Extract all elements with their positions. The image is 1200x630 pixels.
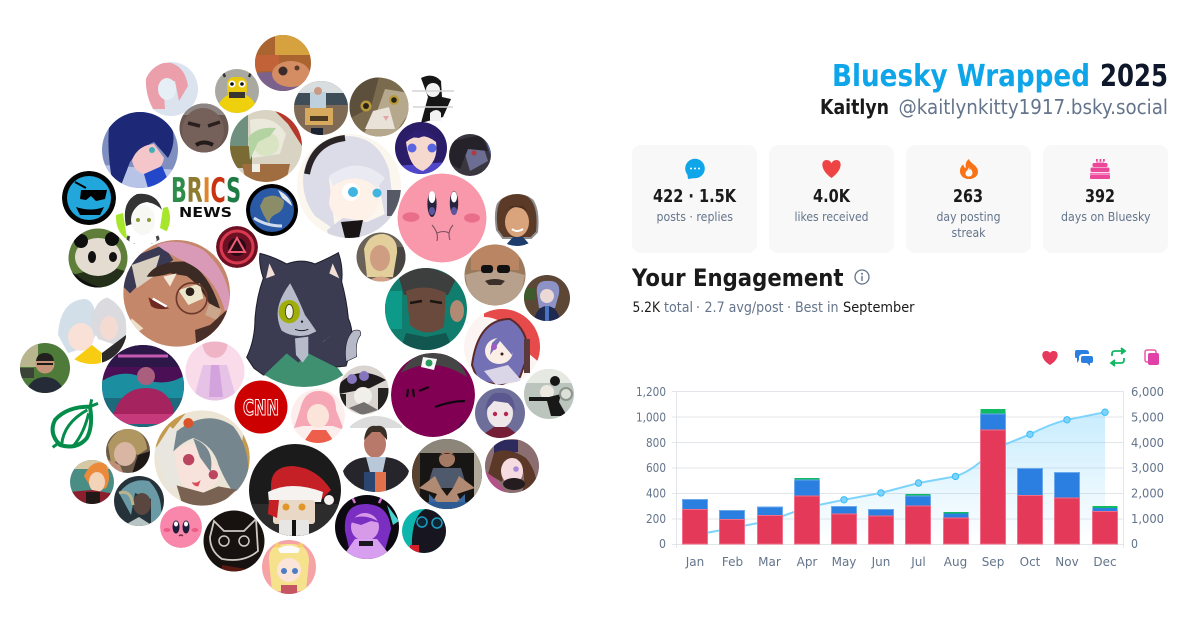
- stacked bars: [682, 409, 1118, 544]
- avatar: pink hair anime girl: [144, 62, 198, 116]
- engagement summary: total: [664, 300, 693, 316]
- avatar: green hair anime at table: [230, 110, 302, 182]
- icon: chat bubble: [685, 159, 705, 179]
- right axis labels: 1,000: [1131, 512, 1164, 526]
- avatar: Kirby face large: [398, 174, 486, 262]
- icon: flame: [960, 159, 978, 179]
- right axis labels: 3,000: [1131, 461, 1164, 475]
- avatar: orange hair anime: [69, 459, 115, 505]
- avatar: plum character with hat: [391, 353, 475, 437]
- avatar: man in suit: [343, 416, 409, 492]
- avatar: The Onion logo: [53, 399, 98, 447]
- right axis labels: 6,000: [1131, 385, 1164, 399]
- icon: likes heart: [1042, 351, 1058, 365]
- cumulative line: [695, 409, 1108, 544]
- left axis labels: [636, 385, 666, 551]
- avatar: red magic seal: [216, 226, 258, 268]
- panel: days on Bluesky: days on Bluesky: [1061, 209, 1151, 224]
- avatar: sitting man: [412, 439, 482, 509]
- avatar: BRICS News logo: NEWS: [179, 206, 232, 221]
- right axis labels: [1131, 385, 1164, 551]
- panel: days on Bluesky: 392: [1085, 186, 1115, 207]
- avatar: blue hair elf: [114, 476, 164, 526]
- avatar cluster: [20, 35, 574, 595]
- left axis labels: 800: [646, 436, 666, 450]
- avatar: purple hair anime: [395, 122, 447, 174]
- avatar: purple hair red hat: [464, 309, 540, 385]
- avatar: witch with flowers: [339, 365, 389, 415]
- avatar: pink pigtails anime: [291, 389, 345, 443]
- month labels: Dec: [1093, 555, 1117, 569]
- avatar: rose hair girl: [485, 439, 539, 493]
- month labels: Apr: [797, 555, 817, 569]
- panel: likes received: [769, 145, 894, 253]
- panel: posts and replies: [632, 145, 757, 253]
- right axis labels: 5,000: [1131, 410, 1164, 424]
- left axis labels: 600: [646, 461, 666, 475]
- panel: day posting streak: 263: [953, 186, 983, 207]
- month labels: Oct: [1020, 555, 1041, 569]
- avatar: Kirby small: [160, 506, 202, 548]
- avatar: blonde woman: [356, 232, 406, 282]
- engagement summary: 5.2K: [632, 300, 661, 316]
- avatar: pale pink portrait: [185, 341, 245, 401]
- panel: days on Bluesky: [1043, 145, 1168, 253]
- icon: birthday cake: [1090, 159, 1110, 179]
- icon: info: [855, 270, 869, 284]
- engagement summary: September: [843, 300, 915, 316]
- avatar: protester with sign: [294, 81, 348, 136]
- engagement summary: ·: [696, 300, 700, 316]
- right axis labels: 2,000: [1131, 486, 1164, 500]
- avatar: dark hair grey figure: [448, 133, 492, 177]
- avatar: manga girl with green background: [116, 191, 170, 245]
- avatar: steamboat Mickey: [524, 369, 574, 419]
- panel: day posting streak: day posting: [936, 209, 1000, 224]
- avatar: blue hair anime: [102, 110, 178, 188]
- avatar: CNN logo: CNN: [243, 396, 279, 420]
- avatar: BRICS News logo: BRICS: [171, 171, 241, 211]
- avatar: panda: [68, 228, 128, 288]
- avatar: skull painting: [255, 35, 311, 91]
- avatar: main cat character: [247, 253, 361, 390]
- avatar: chalk cat sketch: [203, 510, 265, 573]
- left axis labels: 0: [659, 537, 666, 551]
- panel: day posting streak: streak: [952, 225, 986, 240]
- title: Bluesky Wrapped: [832, 59, 1090, 94]
- avatar: two anime girls: [58, 298, 126, 364]
- avatar: man with glasses outdoors: [20, 343, 70, 393]
- engagement summary: Best in: [795, 300, 838, 316]
- month labels: May: [832, 555, 856, 569]
- panel: posts and replies: 422 · 1.5K: [653, 186, 737, 207]
- avatar: grey hair anime with bow: [154, 410, 250, 506]
- avatar: vaporwave politician: [102, 345, 184, 428]
- avatar: earth: [246, 184, 298, 236]
- month labels: Sep: [982, 555, 1004, 569]
- chart legend: [1042, 348, 1159, 366]
- right axis labels: 4,000: [1131, 436, 1164, 450]
- left axis labels: 400: [646, 486, 666, 500]
- month labels: Feb: [722, 555, 743, 569]
- month labels: Aug: [944, 555, 967, 569]
- avatar: CNN logo: [234, 380, 288, 434]
- left axis labels: 1,000: [636, 410, 666, 424]
- avatar: yellow horned character: [214, 68, 260, 114]
- avatar: blue hair anime man: [523, 274, 571, 322]
- month labels: Mar: [758, 555, 781, 569]
- avatar: blue skull with sunglasses: [62, 171, 116, 225]
- month labels: Jan: [685, 555, 704, 569]
- left axis labels: 200: [646, 512, 666, 526]
- icon: heart: [822, 160, 841, 178]
- month labels: Jul: [910, 555, 926, 569]
- avatar: black and white chibi: [412, 76, 454, 123]
- avatar: blonde anime with hand: [106, 429, 150, 473]
- left axis labels: 1,200: [636, 385, 666, 399]
- icon: replies bubbles: [1075, 350, 1093, 366]
- avatar: man's face close up: [179, 103, 229, 154]
- user name and handle: @kaitlynkitty1917.bsky.social: [898, 95, 1168, 119]
- avatar: white hair anime girl: [297, 134, 401, 238]
- avatar: girl with glasses and pink hat: [120, 240, 233, 350]
- icon: reposts arrows: [1111, 348, 1125, 366]
- icon: quotes copies: [1145, 350, 1159, 365]
- avatar: Darth Vader with glasses: [401, 508, 447, 554]
- month labels: Jun: [871, 555, 890, 569]
- user name and handle: Kaitlyn: [820, 95, 889, 119]
- month labels: Nov: [1055, 555, 1079, 569]
- panel: posts and replies: posts · replies: [656, 209, 733, 224]
- bar chart: monthly engagement: [636, 385, 1164, 569]
- panel: day posting streak: [906, 145, 1031, 253]
- right axis labels: 0: [1131, 537, 1138, 551]
- avatar: man in teal scene: [384, 266, 468, 351]
- avatar: chibi with santa hat: [249, 444, 341, 536]
- engagement summary: 2.7 avg/post: [704, 300, 784, 316]
- avatar: purple demon girl: [335, 495, 399, 559]
- heading: your engagement: Your Engagement: [631, 264, 844, 292]
- avatar: illustrated woman: [494, 194, 539, 246]
- panel: likes received: 4.0K: [813, 186, 851, 207]
- avatar: gothic anime girl: [475, 388, 525, 438]
- month labels: [685, 555, 1117, 569]
- engagement summary: [632, 300, 915, 316]
- title: 2025: [1100, 59, 1168, 94]
- engagement summary: ·: [787, 300, 791, 316]
- panel: likes received: likes received: [794, 209, 868, 224]
- avatar: blonde maid catgirl: [262, 540, 316, 595]
- avatar: bald man with beard and sunglasses: [464, 244, 526, 306]
- avatar: tabby cat: [349, 77, 409, 137]
